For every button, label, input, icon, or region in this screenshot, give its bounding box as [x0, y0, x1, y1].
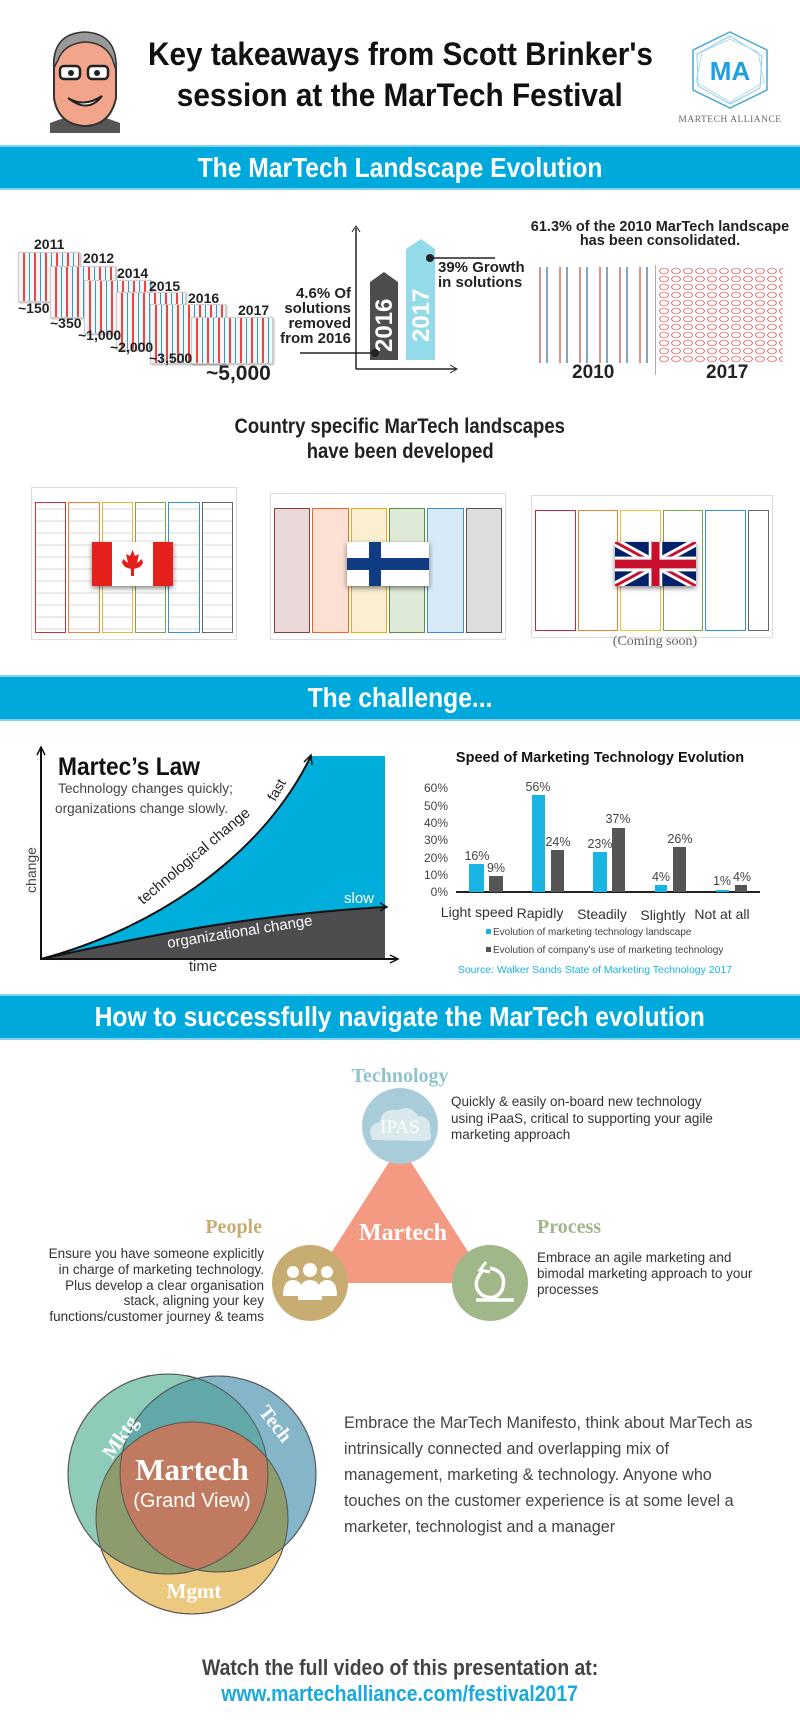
title [148, 36, 652, 113]
diagram: Venn MarTech Grand View: Martech [135, 1452, 249, 1487]
text: Ensure you have someone explicitly [49, 1246, 264, 1261]
logo: MarTech Alliance: MARTECH ALLIANCE [678, 115, 782, 125]
chart: Martec's Law: slow [344, 890, 374, 907]
stacked landscape images with years and counts: 2015 [149, 278, 180, 294]
banner: The MarTech Landscape Evolution: The MarTech Landscape Evolution [198, 152, 602, 183]
icon: Finland flag [347, 542, 429, 586]
chart: 2016 vs 2017 solution growth: 4.6% Of [296, 285, 351, 302]
text: MarTech Manifesto: Embrace the MarTech Manifesto, think about MarTech as [344, 1413, 752, 1432]
logo: MarTech Alliance [678, 31, 782, 125]
chart: Martec's Law: Technology changes quickly; [58, 781, 233, 796]
icon: process loop [452, 1245, 528, 1321]
stacked landscape images with years and counts: 2017 [238, 302, 269, 318]
stacked landscape images with years and counts [18, 236, 276, 385]
chart: Martec's Law: organizational change [166, 912, 314, 952]
stacked landscape images with years and counts: ~350 [50, 315, 82, 331]
chart: 2016 vs 2017 solution growth: 39% Growth [438, 259, 525, 276]
chart: Speed of Marketing Technology Evolution: Rapidly [517, 905, 563, 921]
stacked landscape images with years and counts: 2014 [117, 265, 148, 281]
chart: Speed of Marketing Technology Evolution: Source: Walker Sands State of Marketing Technology 2017 [458, 964, 732, 976]
heading: country specific landscapes: Country specific MarTech landscapes [235, 415, 565, 438]
icon: UK flag [615, 542, 696, 586]
text: Process: Process [537, 1216, 601, 1238]
chart: Speed of Marketing Technology Evolution: 20% [424, 851, 448, 865]
chart: 2016 vs 2017 solution growth: solutions [284, 300, 351, 317]
footer: watch video: Watch the full video of this presentation at: [202, 1655, 598, 1680]
chart: 2016 vs 2017 solution growth: removed [288, 315, 351, 332]
stacked landscape images with years and counts: ~150 [18, 300, 50, 316]
text: stack, aligning your key [124, 1293, 264, 1308]
chart: Martec's Law: organizations change slowly. [55, 801, 228, 816]
text: in charge of marketing technology. [59, 1262, 264, 1277]
chart: Martec's Law [23, 746, 400, 975]
chart: Speed of Marketing Technology Evolution: 24% [545, 835, 571, 849]
chart: Speed of Marketing Technology Evolution: 4% [733, 870, 751, 884]
chart: Speed of Marketing Technology Evolution: 50% [424, 799, 448, 813]
chart: Martec's Law: fast [264, 776, 289, 804]
footer: watch video: www.martechalliance.com/festival2017 [222, 1681, 578, 1706]
banner: The challenge: The challenge... [308, 682, 492, 713]
stacked landscape images with years and counts: 2016 [188, 290, 219, 306]
stacked landscape images with years and counts: ~3,500 [149, 350, 192, 366]
caption: coming soon: (Coming soon) [613, 634, 697, 649]
chart: Martec's Law: Martec’s Law [58, 753, 200, 781]
landscape: UK [531, 495, 773, 638]
chart: Speed of Marketing Technology Evolution: 1% [713, 874, 731, 888]
chart: Speed of Marketing Technology Evolution: 26% [667, 832, 693, 846]
icon: people [272, 1245, 348, 1321]
chart: Speed of Marketing Technology Evolution [424, 750, 760, 976]
chart: Speed of Marketing Technology Evolution: Steadily [577, 906, 627, 922]
consolidation 2010 vs 2017: 2017 [706, 362, 748, 383]
diagram: Venn MarTech Grand View: (Grand View) [133, 1490, 251, 1512]
stacked landscape images with years and counts: ~1,000 [78, 327, 121, 343]
chart: Speed of Marketing Technology Evolution: 30% [424, 833, 448, 847]
chart: Speed of Marketing Technology Evolution: 60% [424, 781, 448, 795]
text: People: People [205, 1216, 262, 1238]
banner: How to successfully navigate [0, 994, 800, 1040]
chart: Speed of Marketing Technology Evolution: 0% [431, 885, 448, 899]
chart: Speed of Marketing Technology Evolution: Light speed [441, 904, 513, 920]
consolidation 2010 vs 2017: 2010 [572, 362, 614, 383]
diagram: Martech triangle [272, 1088, 528, 1321]
banner: The MarTech Landscape Evolution [0, 145, 800, 190]
chart: Speed of Marketing Technology Evolution: Not at all [694, 906, 750, 922]
consolidation 2010 vs 2017: has been consolidated. [580, 233, 740, 249]
chart: Speed of Marketing Technology Evolution: 23% [587, 837, 613, 851]
icon: Canada flag [92, 542, 173, 586]
chart: 2016 vs 2017 solution growth: in solutions [438, 274, 522, 291]
chart: Speed of Marketing Technology Evolution: 56% [525, 780, 551, 794]
landscape: Finland (Canada flag) [31, 487, 237, 640]
chart: Speed of Marketing Technology Evolution: Evolution of marketing technology landscape [493, 927, 692, 938]
text: marketing approach [451, 1127, 570, 1142]
diagram: Martech triangle: Martech [359, 1220, 447, 1246]
diagram: Venn MarTech Grand View: Mktg [98, 1412, 143, 1463]
text: using iPaaS, critical to supporting your agile [451, 1110, 713, 1126]
text: processes [537, 1282, 599, 1297]
diagram: Venn MarTech Grand View: Mgmt [167, 1579, 221, 1603]
consolidation 2010 vs 2017: 61.3% of the 2010 MarTech landscape [531, 219, 789, 235]
landscape: wriber [270, 493, 506, 640]
heading: country specific landscapes: have been developed [307, 440, 493, 463]
banner: How to successfully navigate: How to successfully navigate the MarTech evolution [95, 1001, 705, 1032]
chart: Martec's Law: technological change [135, 804, 254, 908]
chart: Speed of Marketing Technology Evolution: 9% [487, 861, 505, 875]
stacked landscape images with years and counts: 2011 [34, 236, 64, 252]
chart: Speed of Marketing Technology Evolution: 40% [424, 816, 448, 830]
stacked landscape images with years and counts: ~5,000 [206, 362, 271, 385]
chart: Speed of Marketing Technology Evolution: 4% [652, 870, 670, 884]
diagram: Venn MarTech Grand View [68, 1374, 316, 1614]
chart: 2016 vs 2017 solution growth: from 2016 [280, 330, 351, 347]
chart: Speed of Marketing Technology Evolution: 37% [605, 812, 631, 826]
text: functions/customer journey & teams [49, 1309, 264, 1324]
chart: 2016 vs 2017 solution growth [280, 225, 525, 374]
stacked landscape images with years and counts: ~2,000 [110, 339, 153, 355]
diagram: Venn MarTech Grand View: Tech [254, 1402, 296, 1447]
text: MarTech Manifesto: marketer, technologist and a manager [344, 1517, 615, 1536]
consolidation 2010 vs 2017 [531, 219, 789, 383]
icon: IPAS cloud: IPAS [380, 1117, 420, 1138]
banner: The challenge [0, 675, 800, 721]
chart: Speed of Marketing Technology Evolution: Slightly [640, 907, 686, 923]
text: MarTech Manifesto: intrinsically connected and overlapping mix of [344, 1439, 669, 1458]
text: Quickly & easily on-board new technology [451, 1094, 702, 1109]
stacked landscape images with years and counts: 2012 [83, 250, 114, 266]
text: MarTech Manifesto: management, marketing & technology. Anyone who [344, 1465, 712, 1484]
logo: MarTech Alliance: MA [710, 56, 750, 86]
text: MarTech Manifesto [344, 1413, 752, 1536]
text: Plus develop a clear organisation [65, 1278, 264, 1293]
icon: IPAS cloud [362, 1088, 438, 1164]
text: MarTech Manifesto: touches on the customer experience is at some level a [344, 1491, 734, 1510]
text: Embrace an agile marketing and [537, 1250, 731, 1265]
footer: watch video [202, 1655, 598, 1706]
chart: Speed of Marketing Technology Evolution: Speed of Marketing Technology Evolution [456, 750, 744, 766]
chart: Martec's Law: time [189, 958, 217, 975]
chart: Speed of Marketing Technology Evolution: 16% [464, 849, 490, 863]
text: bimodal marketing approach to your [537, 1266, 752, 1281]
icon: Scott Brinker cartoon face [50, 31, 120, 133]
chart: 2016 vs 2017 solution growth: 2017 [408, 289, 435, 342]
chart: 2016 vs 2017 solution growth: 2016 [371, 299, 398, 352]
text: Technology: Technology [351, 1065, 449, 1087]
title: session at the MarTech Festival [177, 77, 623, 113]
heading: country specific landscapes [235, 415, 565, 463]
chart: Speed of Marketing Technology Evolution: 10% [424, 868, 448, 882]
chart: Martec's Law: change [23, 847, 39, 893]
chart: Speed of Marketing Technology Evolution: Evolution of company's use of marketing technology [493, 945, 723, 956]
title: Key takeaways from Scott Brinker's [148, 36, 652, 72]
